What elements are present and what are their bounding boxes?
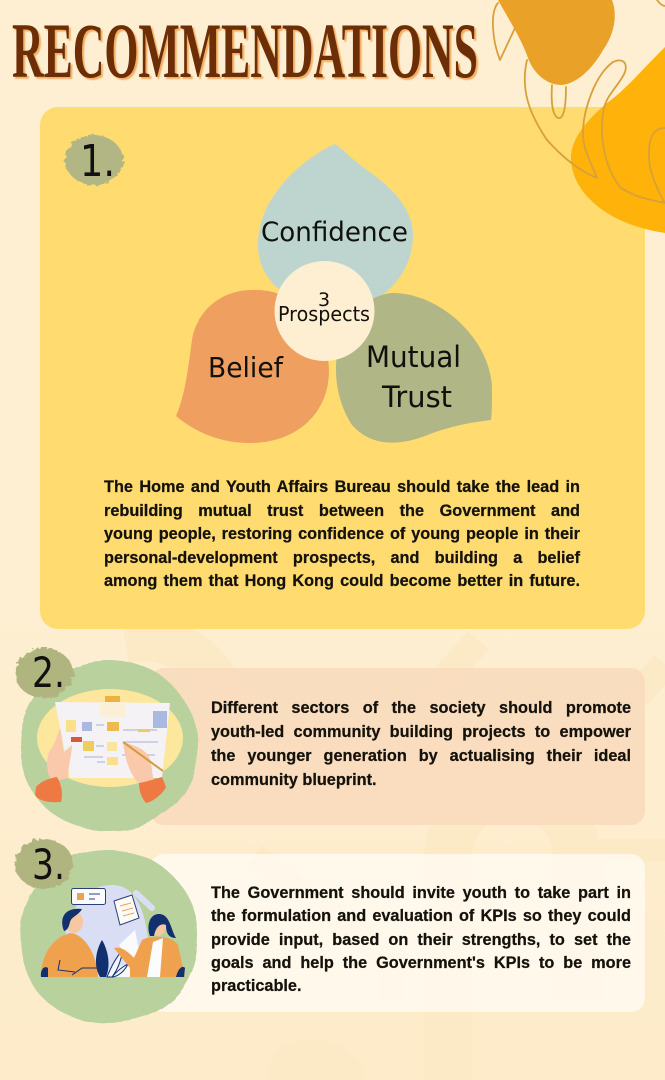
text block: recommendation 2: Different sectors of the society should promote <box>211 699 631 717</box>
text block: recommendation 1 <box>104 478 580 590</box>
petal: confidence: Confidence <box>261 217 408 248</box>
number badge 3 <box>15 839 73 889</box>
illustration: planning board on green blob <box>20 660 198 830</box>
text block: recommendation 1: The Home and Youth Affairs Bureau should take the lead in <box>104 478 580 496</box>
text block: recommendation 3 <box>211 884 631 995</box>
decoration: bright orange blob <box>571 47 665 233</box>
text block: recommendation 1: young people, restoring confidence of young people in their <box>104 525 580 543</box>
text block: recommendation 2: youth-led community building projects to empower <box>211 723 631 741</box>
text block: recommendation 3: practicable. <box>211 977 302 995</box>
petal: belief: Belief <box>208 351 284 384</box>
centre circle: 3 prospects: Prospects <box>278 302 370 326</box>
background watermark shapes <box>125 639 665 1080</box>
decoration: dark orange blob <box>498 0 615 85</box>
centre circle: 3 prospects <box>274 261 374 361</box>
text block: recommendation 1: personal-development prospects, and building a belief <box>104 549 580 567</box>
petal: mutual trust: Trust <box>381 380 452 414</box>
number badge 3: 3. <box>32 840 65 889</box>
text block: recommendation 3: goals and help the Government's KPIs to be more <box>211 954 631 972</box>
number badge 2: 2. <box>32 648 65 697</box>
panel: recommendation 1 <box>40 107 645 629</box>
number badge 1: 1. <box>80 136 115 187</box>
text block: recommendation 2: community blueprint. <box>211 771 377 789</box>
illustration: two people talking on green blob <box>20 850 198 1022</box>
text block: recommendation 3: The Government should invite youth to take part in <box>211 884 631 902</box>
panel: recommendation 2 <box>150 668 645 825</box>
text block: recommendation 3: the formulation and evaluation of KPIs so they could <box>211 907 631 925</box>
panel: recommendation 3 <box>150 854 645 1012</box>
number badge 2 <box>15 648 73 698</box>
decoration: leaf outline <box>493 0 665 203</box>
diagram: three prospects <box>176 144 492 443</box>
petal: mutual trust: Mutual <box>366 340 461 374</box>
text block: recommendation 3: provide input, based on their strengths, to set the <box>211 931 631 949</box>
centre circle: 3 prospects: 3 <box>318 289 330 311</box>
text block: recommendation 2: the younger generation by actualising their ideal <box>211 747 631 765</box>
text block: recommendation 1: among them that Hong Kong could become better in future. <box>104 572 580 590</box>
petal: confidence <box>258 144 413 303</box>
text block: recommendation 1: rebuilding mutual trust between the Government and <box>104 502 580 520</box>
petal: belief <box>176 290 329 443</box>
text block: recommendation 2 <box>211 699 631 789</box>
petal: mutual trust <box>336 293 492 443</box>
